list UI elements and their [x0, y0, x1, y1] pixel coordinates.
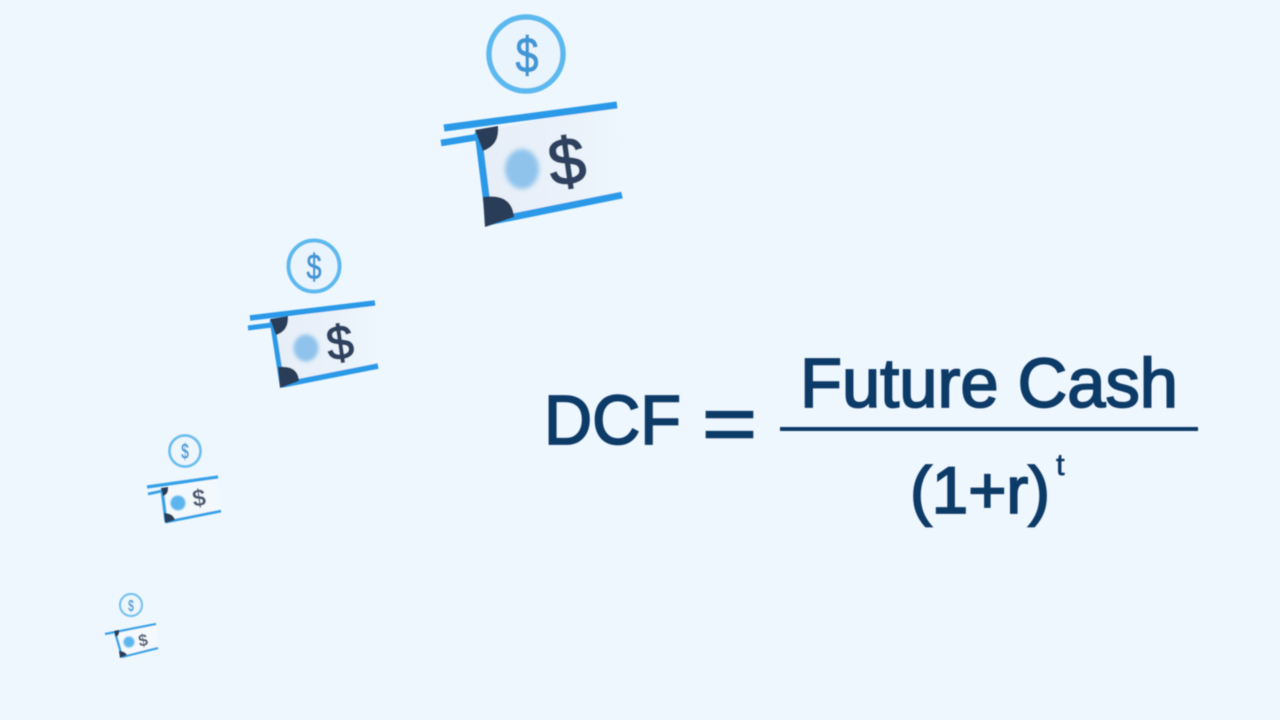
bill: small: $	[191, 484, 208, 513]
bill: large: $	[544, 122, 590, 200]
bill: smallest: $	[137, 630, 150, 651]
bill: medium	[248, 303, 378, 388]
equals sign: =	[702, 379, 757, 468]
coin: medium	[288, 240, 340, 292]
bill: medium: $	[323, 315, 357, 372]
money group: smallest bill and coin	[105, 594, 158, 658]
coin: medium: $	[306, 248, 322, 287]
numerator: Future Cash: Future Cash	[800, 344, 1178, 422]
money group: largest bill and coin	[441, 17, 622, 227]
fraction bar	[780, 427, 1198, 431]
denominator: (1+r) to the power t: (1+r)	[910, 453, 1050, 527]
money group: small bill and coin	[147, 436, 221, 523]
coin: large: $	[516, 27, 538, 83]
denominator: (1+r) to the power t: t	[1056, 447, 1065, 482]
formula: DCF equation	[544, 344, 1198, 527]
bill: large	[441, 105, 622, 227]
coin: large	[489, 17, 563, 91]
formula left side: DCF: DCF	[544, 381, 681, 459]
coin: smallest: $	[128, 598, 134, 615]
coin: small: $	[181, 439, 189, 464]
money group: medium bill and coin	[248, 240, 378, 388]
